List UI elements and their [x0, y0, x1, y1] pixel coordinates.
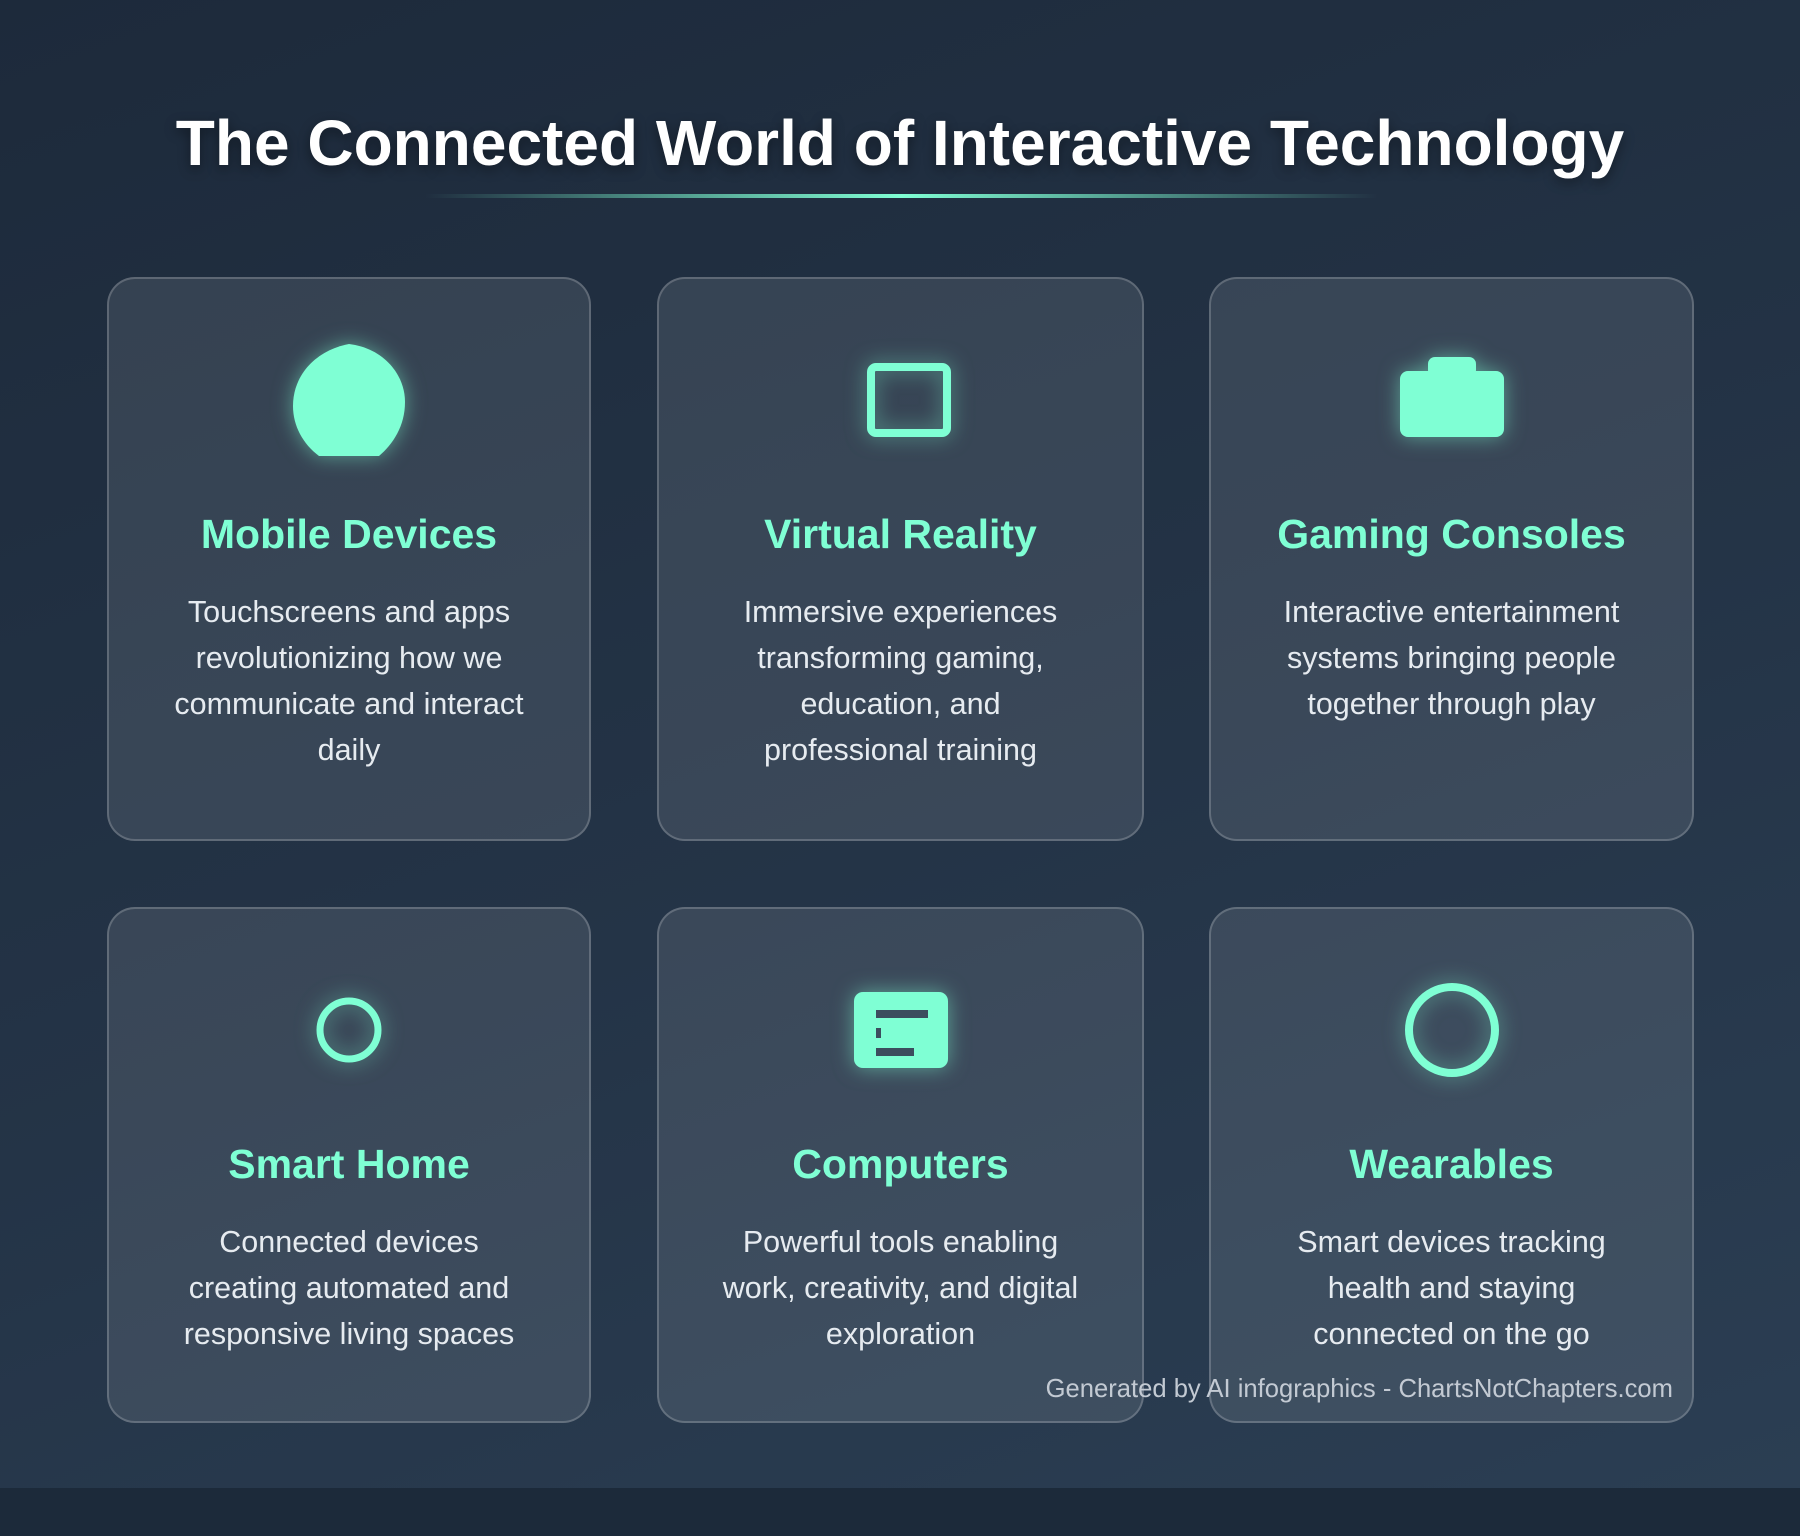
panel: smart home	[107, 907, 591, 1423]
heading: Computers	[792, 1141, 1009, 1187]
text: Interactive entertainment systems bringing people together through play	[1284, 595, 1619, 721]
icon: console	[1387, 344, 1517, 450]
panel: computers	[657, 907, 1144, 1423]
icon: screen	[841, 979, 961, 1081]
heading: Wearables	[1349, 1141, 1554, 1187]
icon: circle	[1394, 972, 1510, 1088]
footer credit: Generated by AI infographics - ChartsNotChapters.com	[1046, 1375, 1673, 1403]
text: Smart devices tracking health and staying connected on the go	[1297, 1225, 1606, 1351]
heading: Mobile Devices	[201, 511, 497, 557]
heading: Smart Home	[228, 1141, 470, 1187]
panel: wearables	[1209, 907, 1694, 1423]
panel: gaming consoles	[1209, 277, 1694, 841]
icon: square	[855, 351, 963, 449]
heading: Gaming Consoles	[1277, 511, 1626, 557]
heading: Virtual Reality	[764, 511, 1037, 557]
text: Connected devices creating automated and responsive living spaces	[184, 1225, 514, 1351]
panel: virtual reality	[657, 277, 1144, 841]
icon: mobile blob	[281, 333, 417, 469]
text: Touchscreens and apps revolutionizing how we communicate and interact daily	[174, 595, 524, 767]
panel: mobile devices	[107, 277, 591, 841]
title: The Connected World of Interactive Technology	[176, 107, 1624, 179]
text: Immersive experiences transforming gaming, education, and professional training	[744, 595, 1057, 767]
icon: ring	[306, 987, 392, 1073]
text: Powerful tools enabling work, creativity, and digital exploration	[723, 1225, 1078, 1351]
